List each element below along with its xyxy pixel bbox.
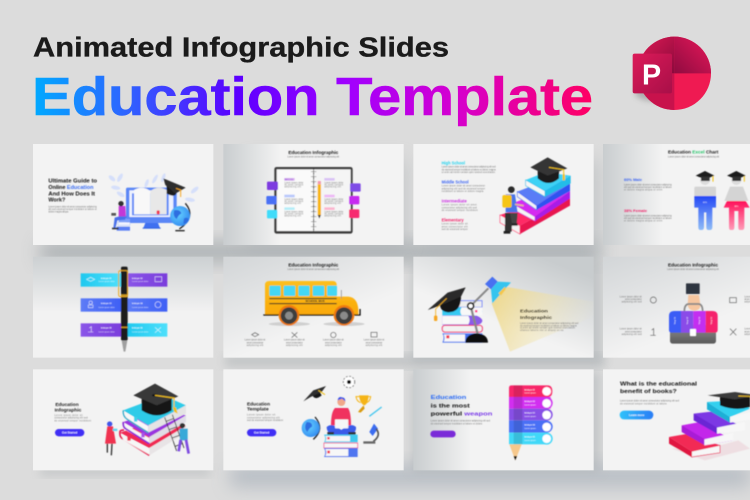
right page entries [324,178,344,218]
stat: 60% male: 60% Male [624,177,643,182]
column: info one: Lorem ipsum dolor sit [245,339,266,342]
bar: info 06: Lorem ipsum dolor [132,330,149,333]
list item: elementary: sed do eiusmod tempor [442,228,468,231]
heading and text: sed do eiusmod tempor incididunt [247,419,283,422]
column: info four [364,332,385,347]
panel: education excel chart [603,144,750,245]
text block: intro paragraph: dolore magna aliqua [48,211,69,214]
right page entries: Lorem ipsum dolor [324,181,344,184]
heading and text [520,308,579,332]
left page entries: Lorem ipsum dolor [284,211,304,214]
stat: 38% female: elit sed do eiusmod tempor incididunt ut labore [624,217,672,220]
text block: intro paragraph: Lorem ipsum dolor sit amet consectetur adipiscing [48,205,97,208]
panel: school bus infographic [223,257,404,358]
figure: woman reading [105,421,117,455]
bar: info 05: Lorem ipsum dolor [98,330,115,333]
heading: is the most [431,403,470,409]
right page entries: Lorem ipsum dolor [324,211,344,214]
bar: info 02: Lorem ipsum dolor [132,280,149,283]
icon: graduation cap [133,384,178,415]
labels in segments: Lorem ipsum [524,403,536,406]
heading: ultimate guide: Work? [48,198,66,204]
labels in segments: Infobyte 01 [524,388,536,391]
right page entries: sit amet consect [324,200,344,203]
stat: 60% male [624,177,672,192]
left page entries: adipiscing elit [284,202,301,205]
list item: high school: ut enim ad minim veniam quis nostrud exercitation [442,171,496,174]
panel: lamp and books [413,257,594,358]
bar: info 06: Infobyte 06 [132,327,143,330]
icon: graduation cap [163,178,186,197]
illustration: school bus: SCHOOL BUS [305,299,325,303]
column: info one: adipiscing elit [247,344,264,347]
column: info four: amet consectetur [366,341,383,344]
icon: globe [302,417,320,439]
list item: elementary: Elementary [442,218,464,223]
illustration: student climbing [502,186,524,234]
heading and text: ut enim ad minim veniam quis nostrud exercitation [520,327,576,330]
list item: middle school: adipiscing elit sed do eiusmod tempor [442,187,485,190]
figure: female with cap: 38% [734,206,739,208]
labels in segments: Infobyte 05 [524,436,536,439]
text block: Lorem ipsum dolor sit amet consectetur adipiscing elit sed [431,420,491,423]
heading: Education [431,395,467,401]
text block: intro paragraph [48,205,97,214]
bar: info 02 [127,273,167,287]
column: info four: Lorem ipsum dolor sit [364,339,385,342]
bar: info 02: Infobyte 02 [132,277,143,280]
figure: student with laptop [327,397,356,435]
button [430,431,456,437]
panel: school bus infographic: Lorem ipsum dolor sit amet consectetur adipiscing elit [287,268,340,271]
stat: 60% male: Lorem ipsum dolor sit amet consectetur adipiscing [624,183,672,186]
heading: benefit of books? [620,389,677,395]
icon: decorative leaves [108,173,200,203]
text block: do eiusmod tempor incididunt ut labore [620,402,667,405]
illustration: hand holding briefcase: Step 01 [674,316,677,324]
column: info three: Lorem ipsum dolor sit [323,339,344,342]
panel: notebook infographic [223,144,404,245]
title: education infographic: Education Infographic [668,262,718,267]
icon: globe [170,203,190,231]
title: education infographic: Education Infographic [288,262,339,267]
text block [431,420,491,425]
list item: elementary [442,218,468,231]
column: info two: adipiscing elit [286,344,303,347]
left page entries: adipiscing elit [284,215,301,218]
column: info one [245,333,266,347]
heading and text: do eiusmod tempor incididunt [54,419,91,422]
list item: elementary: amet consectetur elit [442,225,468,228]
heading: powerful weapon [431,412,493,418]
labels in segments: Infobyte 04 [524,424,536,427]
title: Education Template: Education Template [32,67,593,127]
icon: trophy [356,395,371,413]
list item: intermediate: do eiusmod tempor incididunt [442,209,478,212]
heading and text: Infographic [520,315,552,321]
text block: intro paragraph: elit sed eiusmod tempor incididunt ut labore et [48,208,97,211]
panel: stacked books [33,369,213,470]
column: info two [284,332,305,347]
panel: fountain pen infographic [33,257,213,358]
stat: 38% female: Lorem ipsum dolor sit amet consectetur adipiscing [624,214,672,217]
labels in segments [524,388,536,442]
color tabs [266,182,361,218]
labels in segments: Lorem ipsum [524,427,536,430]
bar: info 03: Infobyte 03 [101,302,112,305]
list item: intermediate: Intermediate [442,199,467,204]
column: info two: Lorem ipsum dolor sit [284,339,305,342]
text block: Lorem ipsum dolor sit amet consectetur adipiscing elit sed [620,400,680,403]
labels in segments: Lorem ipsum [524,392,536,395]
list item: middle school: incididunt ut labore et dolore magna [442,190,484,193]
heading and text: do eiusmod tempor incididunt ut labore et dolore magna [520,324,577,327]
heading: What is the educational [620,382,698,388]
left page entries: INFO 01 [284,179,294,181]
figure: male with cap: 60% [703,202,707,204]
icon: graduation cap [708,392,750,409]
panel: student with objects [223,369,404,470]
heading and text [54,402,91,422]
left item top: Lorem ipsum dolor sit [620,295,642,298]
left page entries [284,178,304,218]
stat: 38% female: et dolore magna aliqua ut enim [624,220,662,223]
heading and text: consectetur adipiscing elit sed [54,417,88,420]
icon: stack of books [442,301,482,343]
right page entries: sit amet consect [324,183,344,186]
title: education infographic: Education Infographic [288,150,339,155]
icon: graduation cap [428,287,466,321]
heading and text: consectetur adipiscing elit [247,416,280,419]
heading: ultimate guide: Online Education [48,185,94,191]
panel: school levels stairs [413,144,594,245]
heading and text: Education [55,402,79,407]
button: get started: Get Started [254,431,270,435]
icon: pencil [369,407,382,416]
illustration: hand holding briefcase: Step 04 [710,316,713,324]
list item: middle school: Middle School [442,180,469,185]
icon: soccer ball [343,376,355,388]
illustration: school bus [263,281,365,326]
illustration: book steps [669,400,750,460]
right page entries: adipiscing elit [324,202,341,205]
left item bottom [620,328,656,336]
heading and text: Infographic [55,407,82,412]
labels in segments: Infobyte 02 [524,400,536,403]
left item bottom: amet consectetur [625,330,642,333]
heading [620,382,698,395]
list item: intermediate: consectetur adipiscing elit sed [442,206,477,209]
title: education excel chart: Education Excel Chart [668,150,719,155]
panel: pencil infographic [413,369,594,470]
bar: info 04 [127,298,167,312]
panel: briefcase infographic [603,257,750,358]
right page entries: adipiscing elit [324,215,341,218]
column: info four: adipiscing elit [366,344,383,347]
icon: student on books [111,201,130,231]
column: info three: amet consectetur [325,341,342,344]
icon: PowerPoint logo: P [642,60,661,92]
left item top: adipiscing elit sed [622,301,642,304]
right page entries: sit amet consect [324,213,344,216]
heading and text: Template [247,407,269,412]
column: info one: amet consectetur [247,341,264,344]
bar: info 01: Infobyte 01 [101,277,112,280]
pencil body with segments [509,385,553,460]
list item: elementary: Lorem ipsum dolor sit [442,223,468,226]
heading: Animated Infographic Slides: Animated Infographic Slides [33,32,449,62]
button: learn more: Learn more [629,413,645,417]
heading and text: Lorem ipsum dolor sit amet consectetur adipiscing elit sed [520,322,579,325]
text block: do eiusmod tempor incididunt ut labore et dolore [431,422,483,425]
stat: 38% female: 38% Female [624,208,648,213]
bar: info 03 [81,298,121,312]
heading [431,395,493,418]
list item: high school [442,161,496,174]
icon: graduation cap [530,157,567,183]
heading and text: Lorem ipsum dolor sit [247,414,276,417]
bar: info 01: Lorem ipsum dolor [98,280,115,283]
left page entries: sit amet consect [284,183,304,186]
column: info three [323,332,344,347]
bar: info 05: Infobyte 05 [101,327,112,330]
left page entries: adipiscing elit [284,185,301,188]
right item bottom [730,328,750,336]
left page entries: Lorem ipsum dolor [284,181,304,184]
bar: info 04: Infobyte 04 [132,302,143,305]
stat: 60% male: et dolore magna aliqua ut enim [624,189,662,192]
list item: intermediate: Lorem ipsum dolor sit amet [442,204,477,207]
bar: info 04: Lorem ipsum dolor [132,306,149,309]
illustration: hand holding briefcase [669,283,718,344]
button: get started: Get Started [62,431,78,435]
left page entries: Lorem ipsum dolor [284,198,304,201]
heading and text: ullamco laboris nisi ut aliquip ex ea [520,329,564,332]
illustration: hand holding briefcase: Step 02 [686,316,689,324]
illustration: book stairs [500,172,571,234]
heading and text [247,402,283,422]
list item: middle school: Lorem ipsum dolor sit amet consectetur [442,185,485,188]
light beam [492,287,594,352]
right page entries: adipiscing elit [324,185,341,188]
icon: ladder [165,415,184,451]
heading and text: Education [520,308,548,314]
panel: benefit of books [603,369,750,470]
labels in segments: Infobyte 03 [524,412,536,415]
panel: notebook infographic: Lorem ipsum dolor sit amet consectetur adipiscing elit [287,155,340,158]
stat: 60% male: elit sed do eiusmod tempor incididunt ut labore [624,186,672,189]
panel: education excel chart: Lorem ipsum dolor sit amet consectetur adipiscing elit [668,155,719,158]
list item: intermediate [442,199,478,212]
icon: fountain pen [119,267,128,352]
icon: PowerPoint logo [633,37,711,110]
panel: briefcase infographic: Lorem ipsum dolor sit amet consectetur adipiscing elit [667,268,719,271]
icon: books under student [324,435,358,457]
illustration: hand holding briefcase: Step 03 [698,316,701,324]
labels in segments: Lorem ipsum [524,439,536,442]
right page entries: Lorem ipsum dolor [324,198,344,201]
column: info three: adipiscing elit [325,344,342,347]
left item top: amet consectetur [625,298,642,301]
text block [620,400,680,405]
left page entries: sit amet consect [284,213,304,216]
left item bottom: Lorem ipsum dolor sit [620,328,642,331]
icon: open book [132,188,169,215]
figure: man on ladder [179,423,189,454]
heading and text: Education [247,402,271,407]
left item top [620,295,656,304]
left item bottom: adipiscing elit sed [622,333,642,336]
list item: high school: High School [442,161,465,166]
column: info two: amet consectetur [286,341,303,344]
icon: computer monitor [126,188,177,229]
icon: microscope [363,424,378,444]
illustration: book stack [120,395,186,455]
bar: info 05 [81,323,121,337]
right item top [730,295,750,304]
list item: high school: Lorem ipsum dolor sit amet consectetur adipiscing elit sed [442,166,496,169]
notebook [274,167,353,234]
list item: middle school [442,180,485,193]
icon: graduation cap [303,386,326,401]
heading: ultimate guide: And How Does It [48,191,95,197]
heading and text: Lorem ipsum dolor sit [54,414,83,417]
left page entries: sit amet consect [284,200,304,203]
stat: 38% female [624,208,672,223]
bar: info 06 [127,323,167,337]
bar: info 01 [81,273,121,287]
icon: pencil [318,181,321,219]
heading: ultimate guide [48,179,98,204]
icon: desk lamp [465,277,511,343]
labels in segments: Lorem ipsum [524,415,536,418]
list item: high school: do eiusmod tempor incididunt ut labore et dolore magna [442,168,496,171]
bar: info 03: Lorem ipsum dolor [98,306,115,309]
panel: online education guide [33,144,213,245]
heading: ultimate guide: Ultimate Guide to [48,179,98,185]
